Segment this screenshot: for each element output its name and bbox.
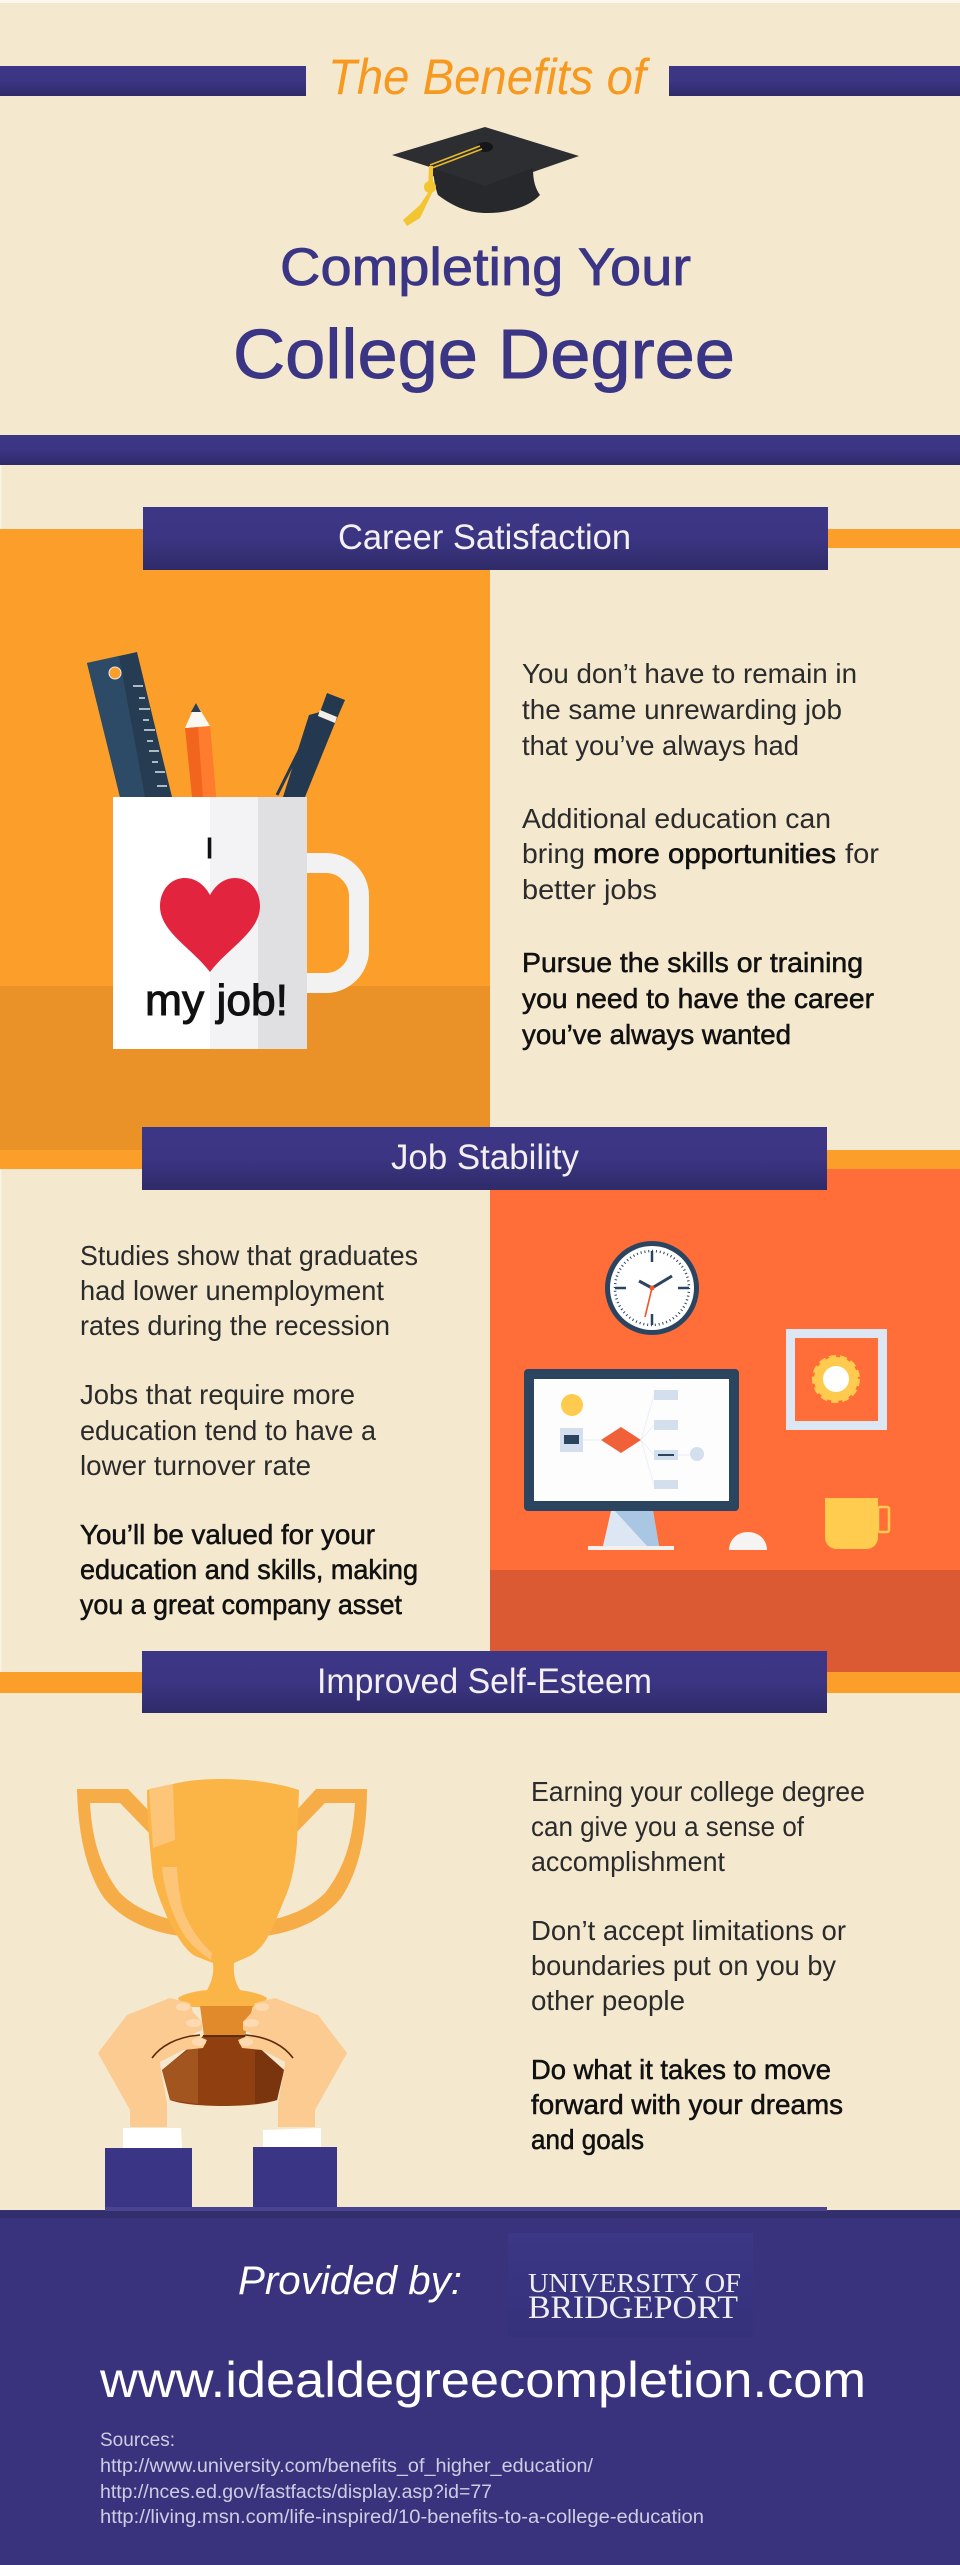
heading: Completing Your: Completing Your: [280, 238, 691, 297]
panel: footer: [0, 2207, 960, 2565]
text block: self-esteem points: forward with your dreams: [531, 2089, 843, 2120]
mug text: I: I: [206, 833, 214, 865]
text block: self-esteem points: other people: [531, 1985, 685, 2016]
icon: wall clock: [605, 1241, 699, 1335]
panel: career satisfaction: [0, 507, 960, 1150]
mug handle: [300, 863, 359, 983]
text block: stability points: had lower unemployment: [80, 1275, 384, 1306]
pencil: [185, 703, 216, 797]
section heading bar: Career Satisfaction: [338, 518, 631, 557]
text block: career points: bring: [522, 838, 585, 869]
top right bar: [669, 66, 960, 96]
logo: University of Bridgeport: BRIDGEPORT: [528, 2290, 738, 2326]
section heading bar: Job Stability: [391, 1138, 579, 1177]
mug body: [113, 797, 307, 1049]
sources list: [100, 2430, 704, 2528]
text block: self-esteem points: accomplishment: [531, 1846, 725, 1877]
text block: self-esteem points: can give you a sense of: [531, 1811, 804, 1842]
sources list: Sources:: [100, 2430, 175, 2451]
text block: career points: Additional education can: [522, 803, 831, 834]
section heading bar: [143, 507, 828, 570]
orange-red panel: [490, 1169, 960, 1571]
sources list: http://living.msn.com/life-inspired/10-benefits-to-a-college-education: [100, 2507, 704, 2528]
icon: computer mouse: [729, 1532, 767, 1550]
orange panel: [0, 529, 490, 987]
text block: stability points: education and skills, making: [80, 1554, 418, 1585]
text block: stability points: Jobs that require more: [80, 1379, 355, 1410]
text block: career points: for: [845, 838, 879, 869]
section heading bar: Improved Self-Esteem: [317, 1662, 652, 1701]
text block: stability points: lower turnover rate: [80, 1450, 311, 1481]
text block: career points: better jobs: [522, 874, 657, 905]
icon: desktop monitor: [524, 1369, 739, 1550]
text block: career points: more opportunities: [593, 838, 836, 869]
sources list: http://www.university.com/benefits_of_higher_education/: [100, 2456, 594, 2477]
trophy neck: [200, 2006, 253, 2036]
text block: stability points: education tend to have a: [80, 1415, 376, 1446]
right cuff: [263, 2128, 321, 2148]
footer background: [0, 2210, 960, 2565]
icon: heart: [160, 878, 260, 972]
section heading bar: [142, 1127, 827, 1190]
text block: career points: you’ve always wanted: [522, 1019, 791, 1050]
icon: trophy held by hands: [77, 1779, 367, 2212]
icon: graduation cap: [392, 127, 579, 226]
title header: [0, 49, 960, 465]
icon: picture frame with flower: [790, 1334, 882, 1426]
text block: self-esteem points: boundaries put on you by: [531, 1950, 836, 1981]
text block: stability points: [80, 1240, 418, 1620]
text block: career points: You don’t have to remain in: [522, 658, 857, 689]
orange strip: [0, 1672, 960, 1693]
icon: mug with ruler, pencil and pen: [87, 652, 359, 1049]
mug text: my job!: my job!: [145, 976, 288, 1025]
left cuff: [123, 2128, 182, 2148]
panel: job stability: [0, 1127, 960, 1672]
text block: self-esteem points: [531, 1776, 865, 2155]
trophy base: [162, 2036, 284, 2106]
text block: career points: Pursue the skills or training: [522, 947, 863, 978]
left hand: [98, 1998, 207, 2127]
logo backing box: [508, 2233, 753, 2337]
logo: University of Bridgeport: [528, 2268, 741, 2326]
heading: College Degree: College Degree: [233, 315, 735, 393]
text block: self-esteem points: and goals: [531, 2124, 644, 2155]
panel: improved self-esteem: [0, 1651, 960, 2212]
text block: stability points: Studies show that graduates: [80, 1240, 418, 1271]
text block: career points: [522, 658, 879, 1050]
text block: career points: you need to have the career: [522, 983, 874, 1014]
icon: yellow mug: [825, 1498, 889, 1549]
heading: The Benefits of: The Benefits of: [328, 49, 651, 105]
text block: self-esteem points: Earning your college degree: [531, 1776, 865, 1807]
text block: career points: that you’ve always had: [522, 730, 799, 761]
text block: stability points: you a great company asset: [80, 1589, 402, 1620]
ruler: [87, 652, 172, 797]
pen: [277, 693, 345, 797]
right sleeve: [253, 2147, 337, 2212]
trophy cup: [147, 1779, 299, 2007]
text block: career points: the same unrewarding job: [522, 694, 842, 725]
left sleeve: [105, 2148, 192, 2212]
trophy handles: [77, 1789, 180, 1936]
text block: self-esteem points: Don’t accept limitations or: [531, 1915, 846, 1946]
divider band: [0, 435, 960, 465]
provided by label: Provided by:: [238, 2259, 462, 2303]
section heading bar: [142, 1651, 827, 1713]
right hand: [238, 1998, 347, 2127]
logo: University of Bridgeport: UNIVERSITY OF: [528, 2268, 741, 2298]
text block: stability points: rates during the recession: [80, 1310, 390, 1341]
text block: stability points: You’ll be valued for your: [80, 1519, 375, 1550]
sources list: http://nces.ed.gov/fastfacts/display.asp?id=77: [100, 2482, 492, 2503]
orange strip: [0, 1150, 960, 1169]
top left bar: [0, 66, 306, 96]
website url: www.idealdegreecompletion.com: [99, 2352, 866, 2408]
text block: self-esteem points: Do what it takes to move: [531, 2054, 831, 2085]
